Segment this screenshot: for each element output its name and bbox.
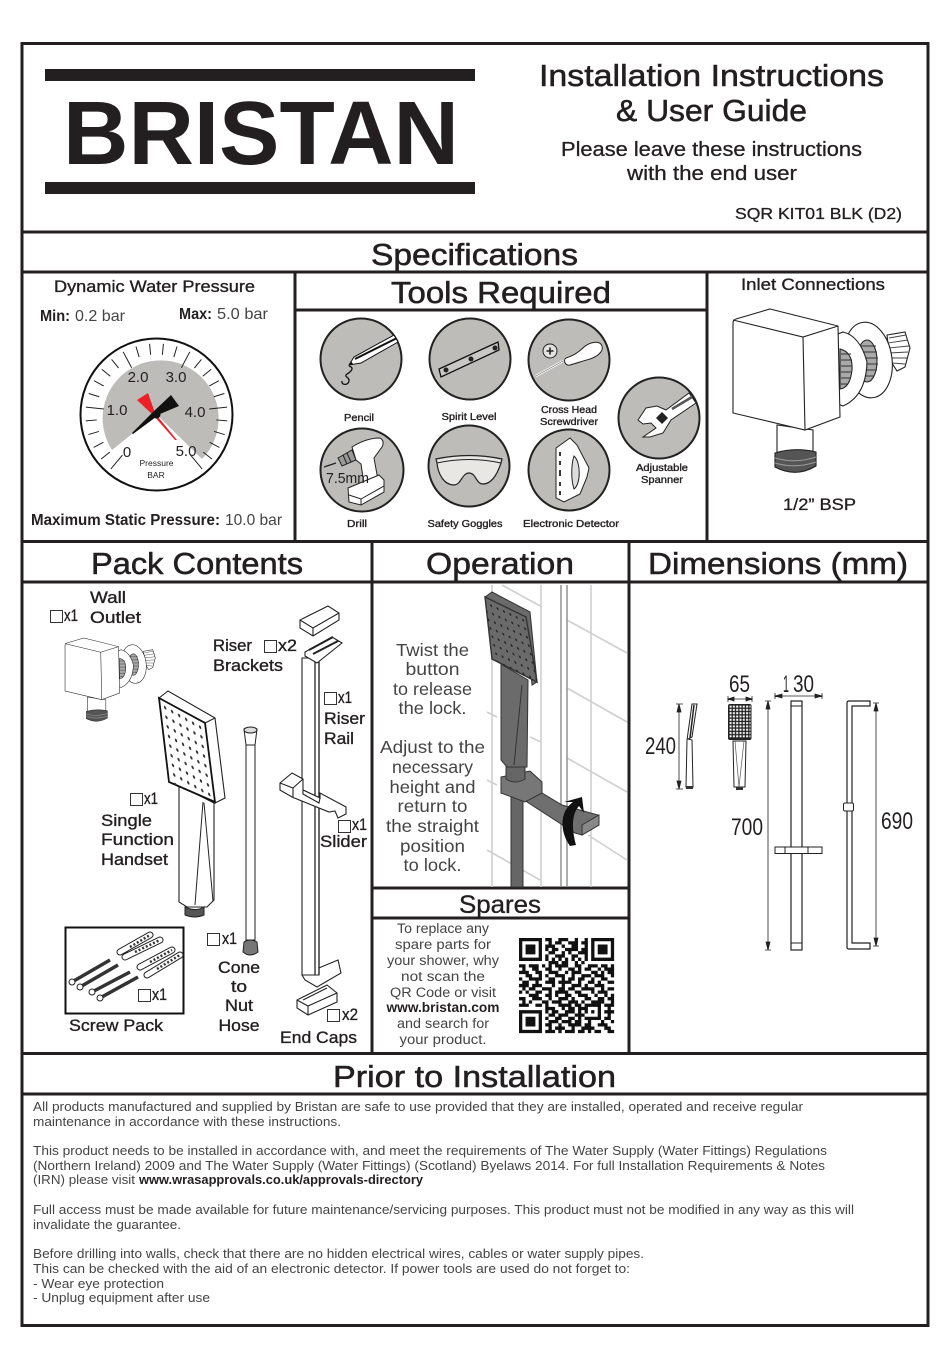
text: spares instructions: www.bristan.com xyxy=(385,1000,500,1015)
text: prior to installation notes: This can be checked with the aid of an electronic detector. If power tools are used do not forget to: xyxy=(33,1261,630,1276)
text: prior to installation notes: - Wear eye protection xyxy=(33,1276,164,1291)
heading: inlet connections: Inlet Connections xyxy=(741,276,885,294)
min pressure xyxy=(40,308,126,325)
item: riser rail with brackets, slider and end caps xyxy=(280,606,346,1015)
text: spares instructions xyxy=(385,921,500,1047)
item: cone to nut hose: Nut xyxy=(225,996,253,1015)
label: slider: Slider xyxy=(320,832,367,851)
dimension: riser rail front view, 700 and 130 xyxy=(731,671,822,950)
illustration: handset on slider xyxy=(485,592,599,887)
text: prior to installation notes xyxy=(33,1099,854,1305)
text: operation instructions: to lock. xyxy=(404,855,462,875)
panel: dynamic water pressure xyxy=(31,278,283,529)
header: document title: Please leave these instructions xyxy=(561,139,862,161)
QR code xyxy=(519,938,614,1033)
item: handset: x1 xyxy=(144,789,158,808)
dimension: handset front view, 65: 65 xyxy=(729,671,750,698)
header: document title xyxy=(539,58,884,185)
text: operation instructions: position xyxy=(400,836,465,856)
max pressure: 5.0 bar xyxy=(217,306,269,323)
icon: electronic detector xyxy=(523,430,620,530)
heading: dimensions: Dimensions (mm) xyxy=(648,546,908,581)
icon: cross head screwdriver xyxy=(528,320,610,428)
illustration: wall outlet xyxy=(733,309,910,472)
item: cone to nut hose: to xyxy=(231,977,247,996)
pressure gauge: BAR xyxy=(147,470,165,480)
pressure gauge xyxy=(80,338,232,490)
label: riser rail: Rail xyxy=(324,729,354,748)
label: slider xyxy=(320,815,367,851)
panel: tools xyxy=(320,318,700,530)
icon: adjustable spanner: Spanner xyxy=(641,475,684,486)
heading: spares: Spares xyxy=(459,891,541,919)
icon: pencil: Pencil xyxy=(344,413,374,424)
text: spares instructions: your shower, why xyxy=(387,953,499,968)
icon: cross head screwdriver: Cross Head xyxy=(541,405,597,416)
label: end caps: End Caps xyxy=(280,1028,357,1047)
text: operation instructions: to release xyxy=(393,679,472,699)
label: riser brackets: Brackets xyxy=(213,656,283,675)
pressure gauge: Pressure xyxy=(139,458,174,468)
maximum static pressure: 10.0 bar xyxy=(225,512,283,529)
max pressure: Max: xyxy=(179,306,212,323)
item: cone to nut hose: Cone xyxy=(218,958,260,977)
label: end caps: x2 xyxy=(342,1005,358,1024)
text: operation instructions: height and xyxy=(390,777,476,797)
dimension: riser rail front view, 700 and 130: 1 xyxy=(783,671,789,698)
item: screw pack: x1 xyxy=(152,985,167,1004)
label: slider: x1 xyxy=(352,815,367,834)
text: operation instructions: Adjust to the xyxy=(380,737,485,757)
header: document title: with the end user xyxy=(626,163,797,185)
text: operation instructions: the straight xyxy=(386,816,479,836)
heading: dynamic water pressure: Dynamic Water Pressure xyxy=(54,278,255,296)
item: screw pack xyxy=(66,928,184,1035)
label: riser brackets: x2 xyxy=(278,636,297,655)
text: prior to installation notes: (Northern Ireland) 2009 and The Water Supply (Water Fittings) (Scotland) Byelaws 2014. For full Installation Requirements & Notes xyxy=(33,1158,825,1173)
dimension: handset front view, 65 xyxy=(728,671,752,790)
heading: prior to installation: Prior to Installation xyxy=(333,1059,616,1094)
dimension: riser rail front view, 700 and 130: 30 xyxy=(793,671,814,698)
text: operation instructions: button xyxy=(406,659,460,679)
item: screw pack: Screw Pack xyxy=(69,1016,164,1035)
text: spares instructions: your product. xyxy=(400,1032,486,1047)
item: cone to nut hose: Hose xyxy=(218,1016,260,1035)
dimension: riser rail side view, 690: 690 xyxy=(881,808,913,835)
header: document title: & User Guide xyxy=(616,93,807,128)
dimension: handset side view, 240 xyxy=(645,704,697,789)
pressure gauge: 5.0 xyxy=(176,443,196,460)
icon: drill: 7.5mm xyxy=(326,471,369,487)
label: 1/2 inch BSP: 1/2” BSP xyxy=(783,495,856,514)
pressure gauge: 0 xyxy=(123,444,131,461)
text: prior to installation notes: All products manufactured and supplied by Bristan are safe to use provided that they are installed, operated and receive regular xyxy=(33,1099,804,1114)
panel: pack contents xyxy=(50,588,367,1047)
text: prior to installation notes: - Unplug equipment after use xyxy=(33,1290,210,1305)
icon: adjustable spanner: Adjustable xyxy=(636,463,688,474)
illustration: wall tiles and rail xyxy=(487,585,627,887)
icon: safety goggles: Safety Goggles xyxy=(428,519,502,530)
min pressure: Min: xyxy=(40,308,70,325)
heading: operation: Operation xyxy=(426,546,574,581)
icon: electronic detector: Electronic Detector xyxy=(523,519,620,530)
dimension: handset side view, 240: 240 xyxy=(645,733,676,760)
min pressure: 0.2 bar xyxy=(75,308,126,325)
icon: adjustable spanner xyxy=(618,378,700,486)
icon: spirit level: Spirit Level xyxy=(442,412,496,423)
heading: pack contents: Pack Contents xyxy=(91,546,303,581)
pressure gauge: 2.0 xyxy=(128,369,148,386)
header: Bristan logo: BRISTAN xyxy=(63,84,459,184)
item: wall outlet: Outlet xyxy=(90,608,141,627)
item: wall outlet: x1 xyxy=(64,606,78,625)
maximum static pressure: Maximum Static Pressure: xyxy=(31,512,220,529)
label: riser rail xyxy=(324,688,365,748)
arrow: twist direction xyxy=(562,797,584,846)
item: cone to nut hose: x1 xyxy=(222,929,237,948)
label: riser brackets xyxy=(213,636,297,675)
heading: specifications: Specifications xyxy=(371,237,578,272)
panel: operation xyxy=(380,585,627,887)
item: wall outlet: Wall xyxy=(90,588,126,607)
text: prior to installation notes: www.wrasapprovals.co.uk/approvals-directory xyxy=(138,1172,424,1187)
item: handset: Handset xyxy=(101,850,168,869)
header: document title: Installation Instructions xyxy=(539,58,884,93)
text: operation instructions: Twist the xyxy=(396,640,469,660)
item: handset: Single xyxy=(101,811,152,830)
item: handset: Function xyxy=(101,830,174,849)
icon: pencil xyxy=(320,318,402,424)
panel: dimensions xyxy=(645,671,913,950)
icon: spirit level xyxy=(430,318,510,423)
item: handset xyxy=(101,691,225,917)
text: operation instructions: return to xyxy=(398,796,468,816)
text: prior to installation notes: invalidate the guarantee. xyxy=(33,1217,181,1232)
icon: drill: Drill xyxy=(347,519,367,530)
text: operation instructions xyxy=(380,640,485,875)
pressure gauge: 1.0 xyxy=(107,402,127,419)
text: prior to installation notes: (IRN) please visit xyxy=(33,1172,135,1187)
panel: inlet connections xyxy=(733,276,910,514)
text: spares instructions: To replace any xyxy=(397,921,489,936)
item: wall outlet xyxy=(50,588,155,721)
text: prior to installation notes: maintenance in accordance with these instructions. xyxy=(33,1114,341,1129)
pressure gauge: 4.0 xyxy=(185,404,205,421)
text: prior to installation notes: This product needs to be installed in accordance with, and meet the requirements of The Water Supply (Water Fittings) Regulations xyxy=(33,1143,827,1158)
icon: safety goggles xyxy=(428,426,510,530)
label: riser brackets: Riser xyxy=(213,636,252,655)
text: prior to installation notes: Before drilling into walls, check that there are no hidden electrical wires, cables or water supply pipes. xyxy=(33,1246,644,1261)
pressure gauge: 3.0 xyxy=(166,369,186,386)
text: operation instructions: necessary xyxy=(392,757,473,777)
text: spares instructions: and search for xyxy=(397,1016,490,1031)
text: spares instructions: QR Code or visit xyxy=(390,985,496,1000)
icon: cross head screwdriver: Screwdriver xyxy=(540,417,599,428)
text: operation instructions: the lock. xyxy=(398,698,466,718)
label: riser rail: Riser xyxy=(324,709,365,728)
text: spares instructions: spare parts for xyxy=(395,937,492,952)
label: riser rail: x1 xyxy=(338,688,352,707)
text: spares instructions: not scan the xyxy=(401,969,485,984)
heading: tools required: Tools Required xyxy=(391,275,611,310)
dimension: riser rail side view, 690 xyxy=(844,701,913,949)
label: end caps xyxy=(280,1005,358,1047)
product code: SQR KIT01 BLK (D2) xyxy=(735,206,902,223)
text: prior to installation notes: Full access must be made available for future maintenance/servicing purposes. This product must not be modified in any way as this will xyxy=(33,1202,854,1217)
icon: drill xyxy=(320,428,404,530)
item: cone to nut hose xyxy=(208,727,260,1035)
max pressure xyxy=(179,306,269,323)
dimension: riser rail front view, 700 and 130: 700 xyxy=(731,814,763,841)
